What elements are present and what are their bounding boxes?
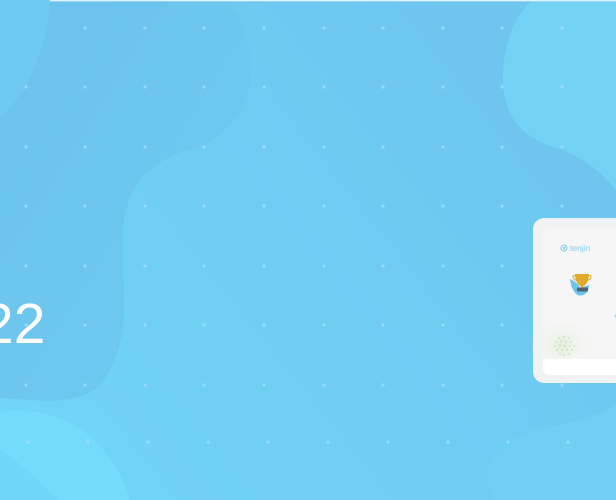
dot grid (25, 27, 569, 443)
shape: bottom-right light blob (487, 405, 616, 500)
shape: bottom-left inner shade (0, 448, 58, 500)
logo: tenjin: tenjin (570, 243, 591, 253)
icon: trophy (570, 274, 591, 296)
card screen (543, 228, 616, 375)
panel: tablet card (530, 218, 616, 383)
shape: top-left dark blob (0, 0, 251, 401)
shape: top-right light blob (503, 0, 616, 190)
shape: bottom-left light blob (0, 411, 130, 500)
green dotted circle (554, 336, 575, 356)
logo: tenjin (561, 243, 591, 253)
card frame (533, 218, 616, 383)
shape: top-left light corner (0, 0, 50, 118)
white footer bar (543, 359, 616, 375)
small blue marker (614, 314, 616, 318)
top white bar (50, 0, 616, 1)
green glow (530, 315, 594, 375)
